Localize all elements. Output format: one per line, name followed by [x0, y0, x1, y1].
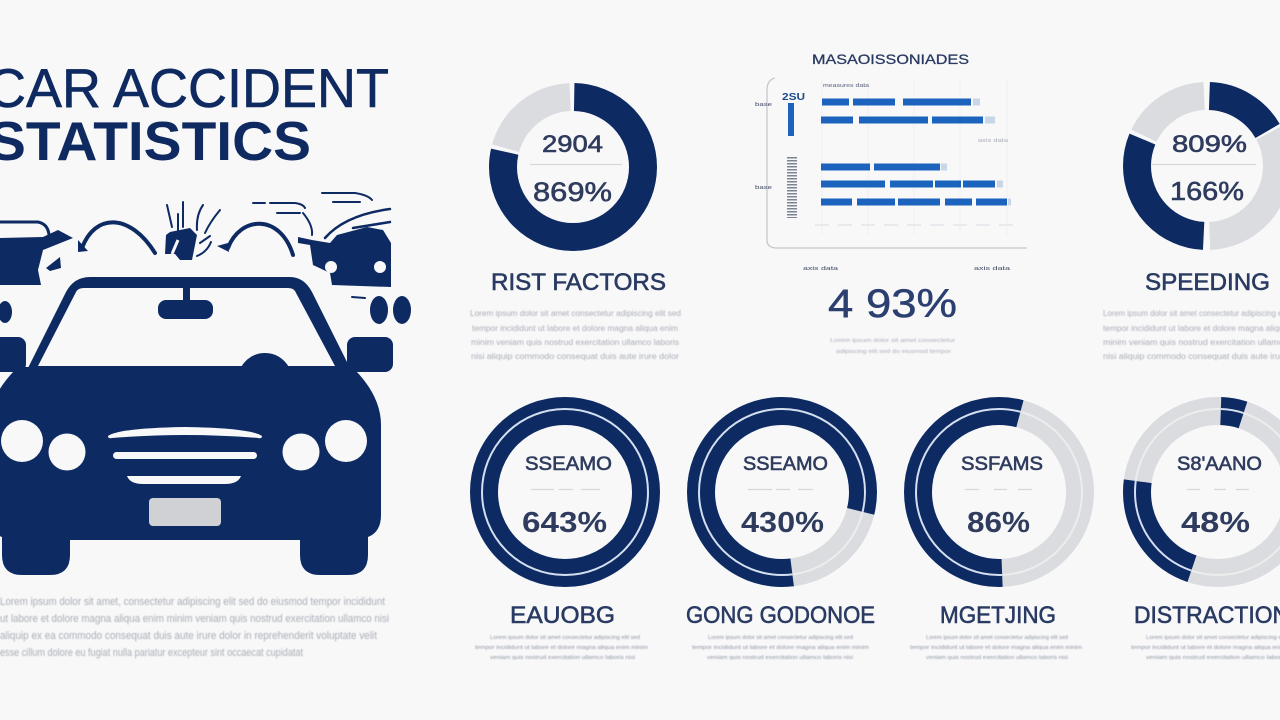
text block: veniam quis nostrud exercitation ullamco laboris nisi	[926, 655, 1068, 661]
text block	[910, 635, 1082, 661]
ring chart: 48%	[1181, 507, 1250, 539]
ring chart	[482, 409, 648, 575]
ring chart: SSFAMS	[961, 454, 1043, 475]
text block: risk factors: nisi aliquip commodo consequat duis aute irure dolor	[471, 352, 679, 361]
text block: veniam quis nostrud exercitation ullamco laboris nisi	[707, 655, 853, 661]
text block: tempor incididunt ut labore et dolore magna aliqua enim minim	[910, 645, 1082, 651]
chart caption	[830, 338, 955, 355]
car body	[0, 353, 381, 575]
donut chart: risk factors	[503, 97, 643, 237]
grille	[108, 427, 262, 484]
axis labels: axis data	[978, 138, 1009, 144]
panel: fatigue ring	[475, 409, 648, 661]
chart axes	[767, 78, 1027, 248]
donut chart: speeding	[1137, 96, 1277, 236]
ring chart: SSEAMO	[525, 454, 612, 475]
text block: speeding: tempor incididunt ut labore et dolore magna aliqua	[1103, 324, 1280, 333]
legend: vertical indicators	[782, 92, 805, 218]
heading: risk factors: RIST FACTORS	[491, 269, 666, 296]
ring chart: SSEAMO	[743, 454, 828, 475]
text block: tempor incididunt ut labore et dolore magna aliqua enim	[1131, 645, 1280, 651]
panel: distraction ring	[1131, 409, 1280, 661]
text block: Lorem ipsum dolor sit amet consectetur adipiscing elit sed	[490, 635, 640, 641]
text block: risk factors: minim veniam quis nostrud exercitation ullamco laboris	[471, 338, 679, 347]
text block	[692, 635, 869, 661]
text block: veniam quis nostrud exercitation ullamco laboris nisi	[490, 655, 635, 661]
ring chart	[699, 409, 865, 575]
heading: speeding: SPEEDING	[1145, 269, 1270, 296]
text block: intro paragraph: Lorem ipsum dolor sit amet, consectetur adipiscing elit sed do eiusmod tempor incididunt	[0, 596, 385, 608]
ring chart: 643%	[522, 507, 607, 539]
ring chart: S8'AANO	[1177, 454, 1262, 475]
arrow: left arc	[78, 222, 155, 253]
panel: bar chart	[755, 51, 1027, 355]
text block: tempor incididunt ut labore et dolore magna aliqua enim minim	[475, 645, 648, 651]
icon: left crashed car	[0, 222, 73, 323]
ring chart	[1135, 409, 1280, 575]
panel: merging ring	[910, 409, 1082, 661]
donut chart: speeding: 166%	[1170, 176, 1244, 206]
text block: speeding: minim veniam quis nostrud exercitation ullamco	[1103, 338, 1280, 347]
arrow: right arc	[217, 224, 293, 255]
axis labels: axis data	[803, 266, 839, 272]
icon: right crashed car	[253, 193, 411, 324]
text block: risk factors: tempor incididunt ut labore et dolore magna aliqua enim	[472, 324, 678, 333]
ring chart	[916, 409, 1082, 575]
rear-view mirror	[158, 287, 213, 319]
text block: risk factors	[470, 309, 681, 361]
donut chart: risk factors: 869%	[533, 177, 612, 207]
chart caption: adipiscing elit sed do eiusmod tempor	[836, 349, 951, 355]
text block: intro paragraph: esse cillum dolore eu fugiat nulla pariatur excepteur sint occaecat cupidatat	[0, 647, 303, 659]
text block: veniam quis nostrud exercitation ullamco laboris	[1146, 655, 1280, 661]
panel: risk factors	[470, 97, 681, 361]
license plate	[149, 498, 221, 526]
legend: vertical indicators: 2SU	[782, 92, 805, 103]
donut chart: risk factors: 2904	[542, 131, 603, 158]
axis labels: measures data	[823, 83, 870, 89]
axis labels: base	[755, 102, 772, 108]
heading: EAUOBG	[510, 602, 615, 629]
text block: risk factors: Lorem ipsum dolor sit amet consectetur adipiscing elit sed	[470, 309, 681, 318]
chart title: MASAOISSONIADES	[812, 51, 969, 67]
axis labels: base	[755, 185, 772, 191]
text block: speeding	[1103, 309, 1280, 361]
text block	[475, 635, 648, 661]
side mirrors	[0, 337, 393, 372]
text block: Lorem ipsum dolor sit amet consectetur adipiscing elit sed	[708, 635, 853, 641]
text block: speeding: nisi aliquip commodo consequat duis aute irure	[1103, 352, 1280, 361]
text block: Lorem ipsum dolor sit amet consectetur adipiscing elit	[1146, 635, 1280, 641]
text block: Lorem ipsum dolor sit amet consectetur adipiscing elit sed	[926, 635, 1068, 641]
chart caption: Lorem ipsum dolor sit amet consectetur	[830, 338, 955, 344]
axis labels	[755, 83, 1012, 272]
ring chart: 430%	[741, 507, 824, 539]
text block: intro paragraph: ut labore et dolore magna aliqua enim minim veniam quis nostrud exercitation ullamco nisi	[0, 613, 389, 625]
title	[0, 57, 389, 172]
bar chart rows	[821, 98, 1011, 206]
icon: crash scene above car	[0, 193, 411, 324]
heading: MGETJING	[940, 602, 1056, 629]
ring chart: 86%	[967, 507, 1030, 539]
text block: tempor incididunt ut labore et dolore magna aliqua enim minim	[692, 645, 869, 651]
icon: impact burst	[165, 202, 220, 260]
big number: 4 93%	[828, 282, 957, 326]
axis labels: axis data	[974, 266, 1012, 272]
icon: car front view	[0, 277, 393, 575]
windshield frame	[28, 277, 350, 368]
text block	[1131, 635, 1280, 661]
donut chart: speeding: 809%	[1172, 131, 1247, 158]
headlights	[1, 420, 367, 470]
panel: speeding	[1103, 96, 1280, 361]
text block: intro paragraph	[0, 596, 389, 659]
text block: intro paragraph: aliquip ex ea commodo consequat duis aute irure dolor in reprehenderit voluptate velit	[0, 630, 377, 642]
panel: going ring	[686, 409, 875, 661]
heading: GONG GODONOE	[686, 602, 875, 629]
